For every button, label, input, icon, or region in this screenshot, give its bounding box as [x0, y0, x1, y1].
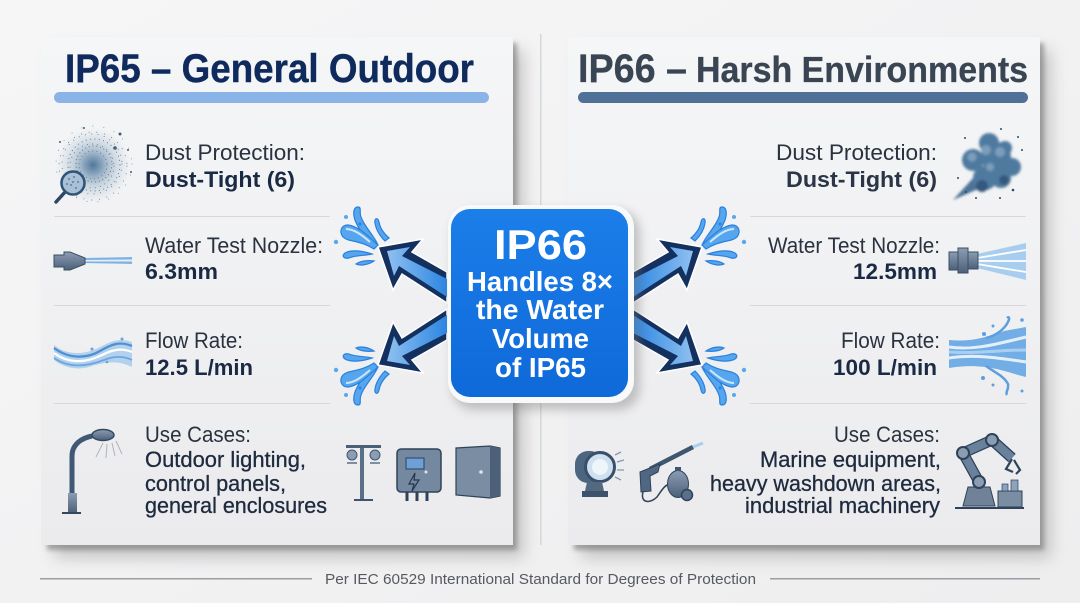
text: use cases: Outdoor lighting,: [145, 447, 306, 472]
callout: IP66 handles 8x the water volume: of IP65: [495, 352, 586, 383]
text: use cases: general enclosures: [145, 493, 327, 518]
text: water test nozzle: Water Test Nozzle:: [145, 233, 323, 258]
panel: IP66 harsh environments: [568, 37, 1051, 558]
text: use cases: [710, 422, 941, 518]
text: water test nozzle: 6.3mm: [145, 259, 218, 284]
heading: IP66: IP66 –: [578, 47, 687, 91]
icon: pressure washer: [640, 443, 703, 501]
text: flow rate: [145, 328, 253, 380]
text: flow rate: 12.5 L/min: [145, 355, 253, 380]
callout: IP66 handles 8x the water volume: Volume: [492, 323, 589, 354]
text: use cases: [145, 422, 327, 518]
text: dust protection: Dust-Tight (6): [786, 167, 937, 192]
heading: IP66: Harsh Environments: [696, 49, 1028, 90]
icon: gentle water wave: [54, 338, 132, 368]
text: use cases: industrial machinery: [745, 493, 940, 518]
text: dust protection: [145, 140, 305, 192]
text: flow rate: 100 L/min: [833, 355, 937, 380]
icon: control panel box: [397, 449, 441, 501]
icon: marine spotlight: [575, 451, 624, 497]
arrow: bottom left with splash: [334, 309, 447, 405]
text: water test nozzle: 12.5mm: [853, 259, 937, 284]
text: dust protection: [776, 140, 937, 192]
text: flow rate: Flow Rate:: [841, 328, 940, 353]
icon: heavy water flow: [949, 317, 1026, 395]
icon: twin pole lights: [346, 445, 381, 500]
heading underline: IP66: [578, 92, 1028, 103]
icon: dust cloud: [953, 128, 1023, 200]
callout: IP66 handles 8x the water volume: the Water: [476, 294, 604, 325]
text: use cases: Use Cases:: [145, 422, 251, 447]
text: water test nozzle: [768, 233, 940, 284]
icon: street lamp: [62, 430, 122, 513]
icon: enclosure cabinet: [456, 446, 500, 498]
text: dust protection: Dust Protection:: [145, 140, 305, 165]
text: use cases: Marine equipment,: [760, 447, 941, 472]
icon: robot arm: [955, 434, 1024, 508]
text: use cases: control panels,: [145, 471, 286, 496]
icon: dust with magnifier: [55, 126, 132, 203]
text: water test nozzle: Water Test Nozzle:: [768, 233, 940, 258]
panel: IP65 general outdoor: [41, 37, 524, 558]
arrow: top left with splash: [334, 207, 447, 303]
callout: IP66 handles 8x the water volume: IP66: [494, 221, 587, 268]
arrow: bottom right with splash: [633, 309, 746, 405]
text: use cases: heavy washdown areas,: [710, 471, 941, 496]
text: flow rate: Flow Rate:: [145, 328, 243, 353]
text: use cases: Use Cases:: [834, 422, 940, 447]
callout: IP66 handles 8x the water volume: [448, 205, 640, 410]
text: water test nozzle: [145, 233, 323, 284]
icon: small nozzle: [54, 252, 132, 270]
text: dust protection: Dust Protection:: [776, 140, 937, 165]
heading: IP65: IP65 – General Outdoor: [65, 47, 474, 91]
heading underline: IP65: [54, 92, 489, 103]
arrow: top right with splash: [633, 207, 746, 303]
heading: IP66: [578, 47, 1028, 91]
footer: standard note: Per IEC 60529 International Standard for Degrees of Protection: [325, 572, 756, 588]
callout: IP66 handles 8x the water volume: Handles 8×: [467, 266, 613, 297]
text: dust protection: Dust-Tight (6): [145, 167, 295, 192]
icon: wide nozzle: [949, 243, 1026, 280]
text: flow rate: [833, 328, 940, 380]
